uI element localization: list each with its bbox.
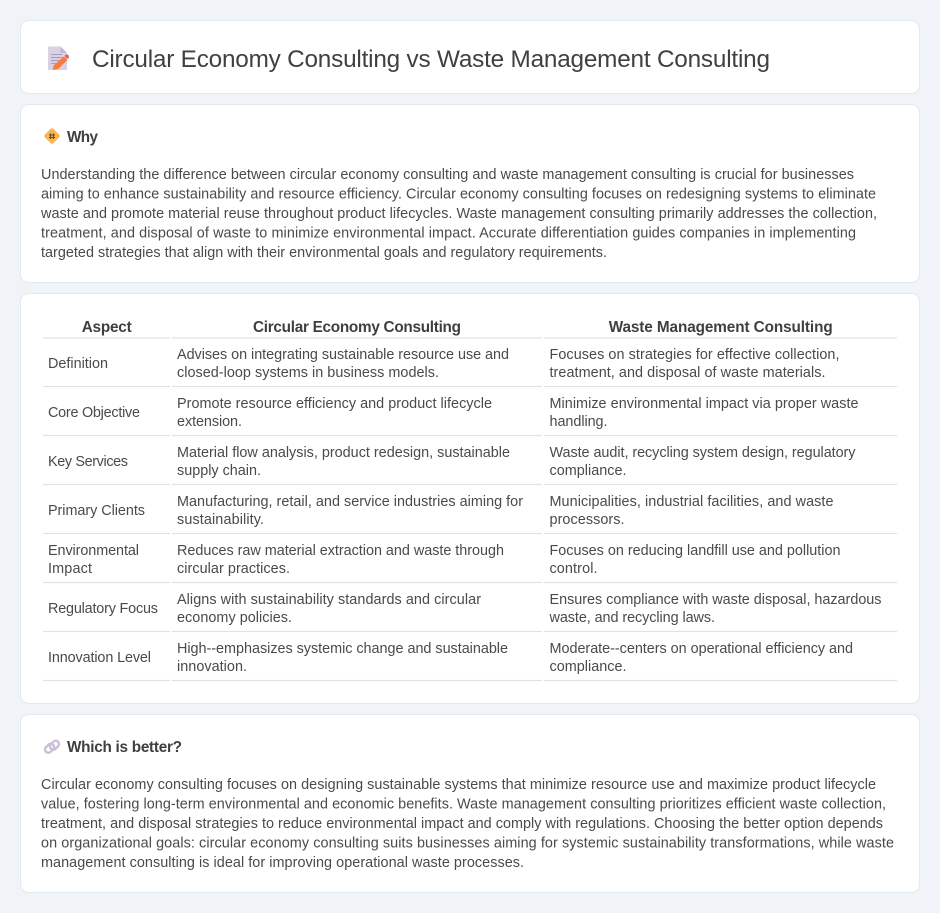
table header row: Circular Economy Consulting xyxy=(253,319,461,336)
icon: document with pencil xyxy=(48,46,69,70)
panel: which is better xyxy=(20,714,920,892)
row: core objective xyxy=(43,396,897,436)
row: innovation level: innovation. xyxy=(177,659,247,675)
row: regulatory focus: Regulatory Focus xyxy=(48,601,158,617)
text block: why paragraph: waste and promote material reuse throughout product lifecycles. Waste management consulting primarily addresses the collection, xyxy=(40,206,877,222)
row: core objective: Promote resource efficiency and product lifecycle xyxy=(177,396,492,412)
row: key services: Material flow analysis, product redesign, sustainable xyxy=(177,445,510,461)
row: environmental impact: Environmental xyxy=(48,543,139,559)
panel: comparison table xyxy=(20,294,920,704)
row: definition xyxy=(43,347,897,386)
row: regulatory focus xyxy=(43,592,897,632)
row: core objective: Minimize environmental impact via proper waste xyxy=(550,396,858,412)
heading: which is better: Which is better? xyxy=(67,739,182,756)
panel: header xyxy=(20,20,920,94)
row: innovation level xyxy=(43,641,897,680)
row: definition: closed-loop systems in business models. xyxy=(177,365,439,381)
text block: which is better paragraph xyxy=(41,777,894,871)
row: definition: Definition xyxy=(48,356,108,372)
heading: why: Why xyxy=(67,129,98,146)
row: primary clients xyxy=(43,494,897,534)
row: regulatory focus: Ensures compliance with waste disposal, hazardous xyxy=(550,592,882,608)
panel: why xyxy=(20,104,920,282)
table header row: Waste Management Consulting xyxy=(609,319,833,336)
row: core objective: Core Objective xyxy=(48,405,140,421)
row: innovation level: Innovation Level xyxy=(48,650,151,666)
row: key services: Waste audit, recycling system design, regulatory xyxy=(550,445,856,461)
row: regulatory focus: economy policies. xyxy=(177,610,292,626)
row: key services: compliance. xyxy=(550,463,626,479)
text block: which is better paragraph: treatment, and disposal strategies to reduce environmental impact and comply with regulations. Choosing the better option depends xyxy=(41,816,883,832)
row: key services xyxy=(43,445,897,484)
row: definition: Advises on integrating sustainable resource use and xyxy=(177,347,509,363)
row: innovation level: compliance. xyxy=(550,659,626,675)
row: environmental impact: Impact xyxy=(48,561,92,577)
row: environmental impact: Focuses on reducing landfill use and pollution xyxy=(550,543,840,559)
text block: which is better paragraph: value, fostering long-term environmental and economic benefits. Waste management consulting prioritizes efficient waste collection, xyxy=(41,796,886,812)
row: environmental impact xyxy=(43,543,897,582)
table header row: Aspect xyxy=(82,319,132,336)
row: environmental impact: Reduces raw material extraction and waste through xyxy=(177,543,504,559)
row: core objective: extension. xyxy=(177,414,242,430)
text block: why paragraph: aiming to enhance sustainability and resource efficiency. Circular economy consulting focuses on redesigning systems to eliminate xyxy=(41,186,876,202)
row: key services: Key Services xyxy=(48,454,128,470)
row: primary clients: Municipalities, industrial facilities, and waste xyxy=(550,494,834,510)
row: key services: supply chain. xyxy=(177,463,261,479)
row: definition: Focuses on strategies for effective collection, xyxy=(550,347,840,363)
row: environmental impact: circular practices. xyxy=(177,561,290,577)
row: primary clients: sustainability. xyxy=(177,512,264,528)
row: core objective: handling. xyxy=(550,414,608,430)
row: regulatory focus: waste, and recycling laws. xyxy=(548,610,715,626)
text block: why paragraph: treatment, and disposal of waste to minimize environmental impact. Accurate differentiation guides companies in implementing xyxy=(41,226,856,242)
text block: why paragraph xyxy=(40,167,877,261)
icon: chain link xyxy=(44,739,60,754)
text block: which is better paragraph: on organizational goals: circular economy consulting suits businesses aiming for systemic sustainability transformations, while waste xyxy=(41,836,894,852)
row: regulatory focus: Aligns with sustainability standards and circular xyxy=(177,592,481,608)
text block: which is better paragraph: Circular economy consulting focuses on designing sustainable systems that minimize resource use and maximize product lifecycle xyxy=(41,777,876,793)
row: environmental impact: control. xyxy=(550,561,598,577)
row: primary clients: Primary Clients xyxy=(48,503,145,519)
title: Circular Economy Consulting vs Waste Management Consulting xyxy=(92,46,770,73)
row: definition: treatment, and disposal of waste materials. xyxy=(550,365,826,381)
row: primary clients: Manufacturing, retail, and service industries aiming for xyxy=(177,494,523,510)
text block: why paragraph: targeted strategies that align with their environmental goals and regulatory requirements. xyxy=(41,245,607,261)
icon: warning diamond xyxy=(44,128,60,144)
row: innovation level: High--emphasizes systemic change and sustainable xyxy=(177,641,508,657)
text block: why paragraph: Understanding the difference between circular economy consulting and waste management consulting is crucial for businesses xyxy=(41,167,854,183)
row: primary clients: processors. xyxy=(550,512,624,528)
table header row xyxy=(43,319,897,338)
text block: which is better paragraph: management consulting is ideal for improving operational waste processes. xyxy=(41,855,524,871)
row: innovation level: Moderate--centers on operational efficiency and xyxy=(550,641,853,657)
